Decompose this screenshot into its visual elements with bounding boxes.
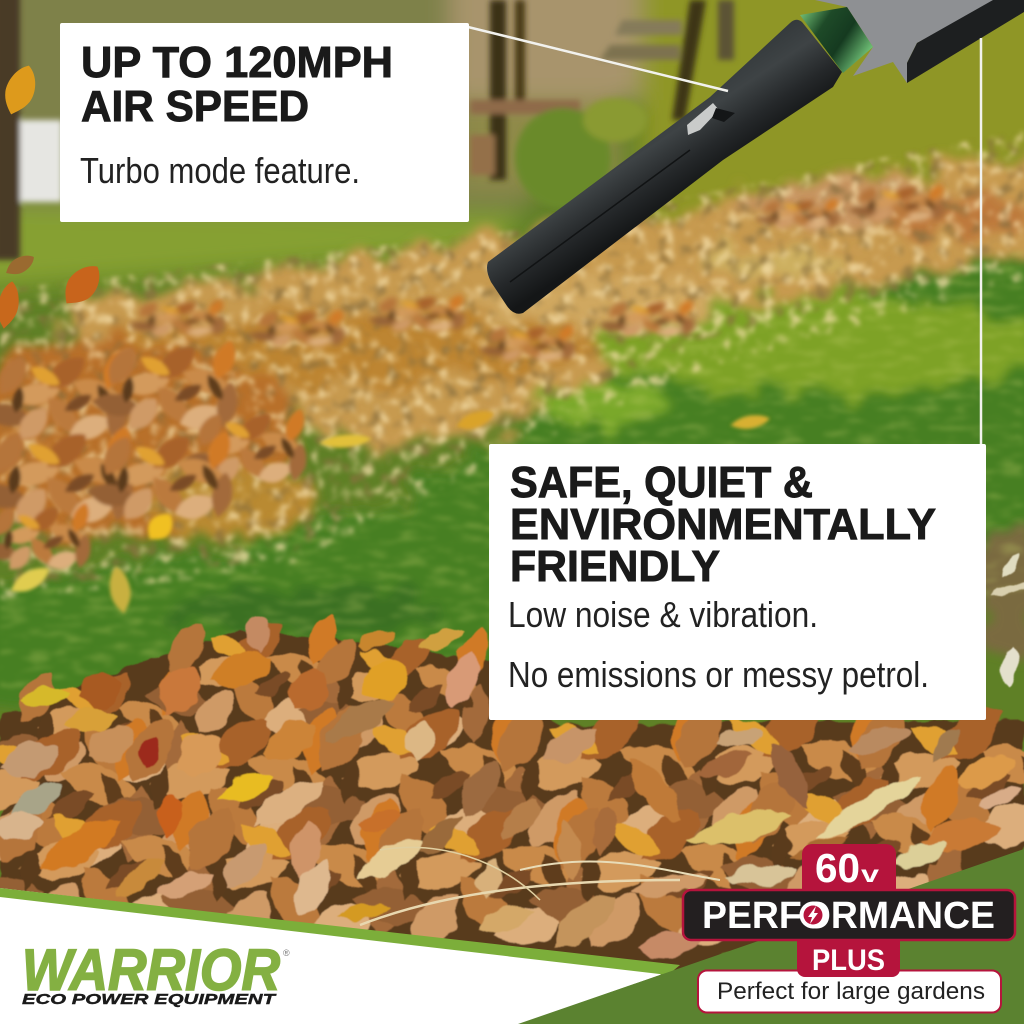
blower nozzle and tool body (487, 0, 1024, 314)
logo: warrior eco power equipment: WARRIOR (22, 938, 280, 1003)
heading: up to 120mph air speed: UP TO 120MPH (81, 38, 393, 87)
heading: safe, quiet and environmentally friendly: SAFE, QUIET & (510, 458, 813, 507)
plus tab (797, 930, 900, 977)
body text: Low noise & vibration. (508, 594, 818, 635)
green corner (518, 849, 1024, 1024)
battery (907, 0, 1024, 83)
panel: safe quiet (489, 444, 986, 720)
foreground leaf pile (0, 550, 1024, 975)
grey tool body (815, 0, 1000, 83)
60v tab (802, 844, 896, 900)
heading: safe, quiet and environmentally friendly: ENVIRONMENTALLY (510, 500, 936, 549)
logo: warrior eco power equipment: ECO POWER EQUIPMENT (22, 992, 277, 1008)
mid-field leaves (0, 337, 771, 615)
grass texture (0, 250, 1024, 690)
underlayer of leaf clusters (0, 610, 1024, 959)
logo: warrior eco power equipment: ® (283, 948, 290, 958)
performance bar: PERFORMANCE (702, 895, 995, 937)
bottom white band with green stripe (0, 888, 680, 1024)
badge: 60v performance plus (683, 844, 1015, 1012)
callout line: air speed (468, 27, 728, 91)
60v tab: 60 (815, 845, 860, 891)
panel: air speed (60, 23, 469, 222)
60v tab: v (861, 861, 879, 887)
green collar (800, 7, 873, 73)
icon: lightning bolt in O (800, 902, 826, 928)
plus tab: PLUS (812, 944, 885, 977)
body text: No emissions or messy petrol. (508, 654, 929, 695)
heading: safe, quiet and environmentally friendly (510, 458, 936, 591)
heading: safe, quiet and environmentally friendly: FRIENDLY (510, 542, 720, 591)
heading: up to 120mph air speed (81, 38, 393, 131)
dark and light flecks (0, 130, 1024, 600)
body text: Turbo mode feature. (80, 150, 360, 191)
body text (508, 594, 929, 695)
white pill: perfect for large gardens: Perfect for large gardens (717, 978, 985, 1005)
white pill: perfect for large gardens (698, 970, 1001, 1012)
callout line: quiet (980, 38, 982, 446)
black tube (487, 20, 842, 314)
heading: up to 120mph air speed: AIR SPEED (81, 82, 309, 131)
